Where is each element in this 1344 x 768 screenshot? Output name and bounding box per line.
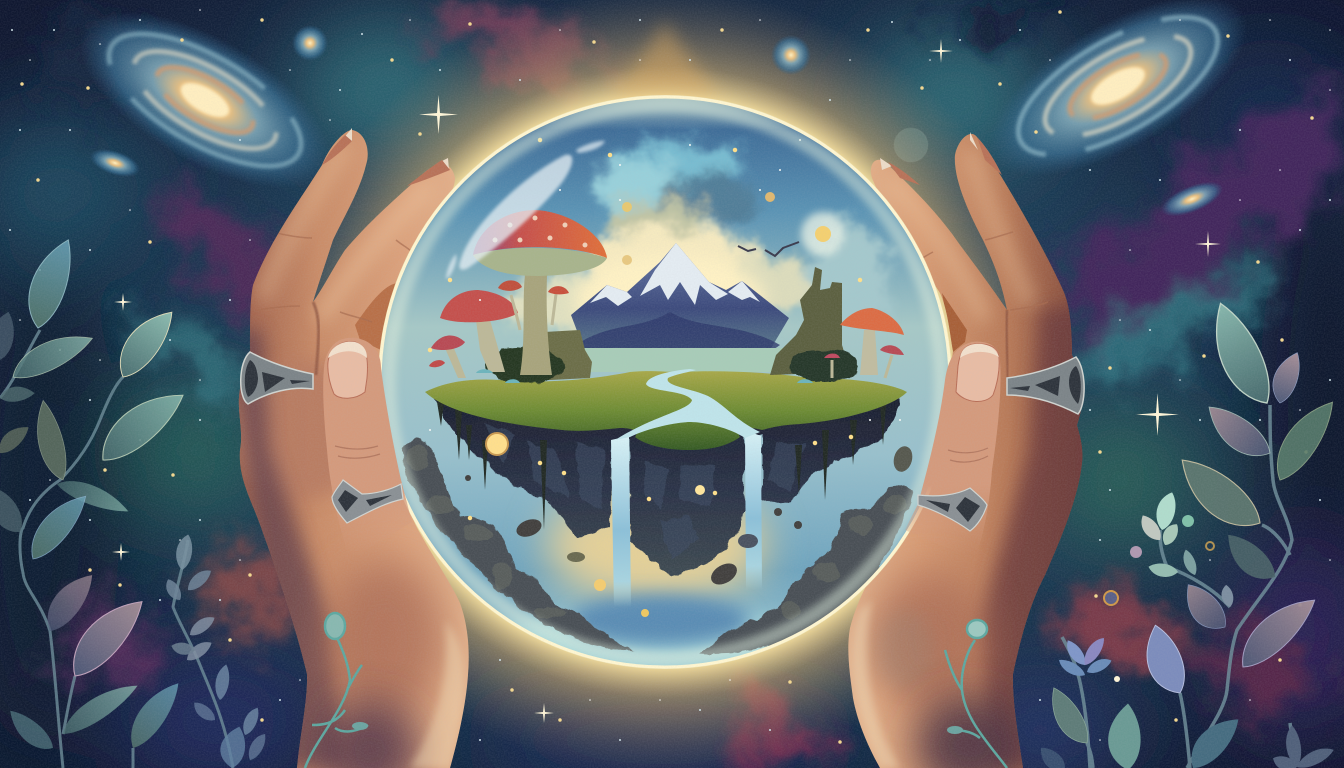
foliage: left clump xyxy=(485,347,565,383)
small mushrooms xyxy=(429,280,904,383)
sun and birds xyxy=(622,192,845,265)
left fingernail tips xyxy=(343,128,449,170)
glow: warm rays above orb xyxy=(610,20,720,95)
fireflies xyxy=(430,140,900,617)
ring: left index xyxy=(241,352,313,404)
hanging roots xyxy=(437,402,886,530)
river xyxy=(615,369,760,440)
mushroom: large xyxy=(473,210,607,375)
mushroom: right xyxy=(840,308,904,375)
plant: left foliage xyxy=(0,233,270,768)
clouds xyxy=(470,141,890,666)
right hand shading xyxy=(852,150,1100,768)
sprouts in front of wrists xyxy=(305,613,1007,768)
left thumb xyxy=(241,338,412,560)
island grass xyxy=(425,371,907,450)
galaxy: top left xyxy=(53,0,357,224)
orb sky xyxy=(380,95,950,675)
mushroom: medium left xyxy=(440,290,518,372)
floating boulders xyxy=(465,444,915,589)
ring: right thumb xyxy=(918,488,987,531)
right fingernail tips xyxy=(880,132,978,170)
ring: right index xyxy=(1007,357,1084,414)
orb rim glow xyxy=(378,95,952,669)
crystal orb xyxy=(378,95,952,675)
lower left rock arm xyxy=(403,438,635,652)
rock plates xyxy=(485,425,805,560)
orb rim xyxy=(380,97,950,667)
orb contents xyxy=(380,95,950,675)
left stems xyxy=(0,330,233,768)
small galaxies xyxy=(87,25,1227,223)
glass highlights xyxy=(446,141,605,279)
waterfalls xyxy=(611,430,762,607)
ring: left thumb xyxy=(332,480,403,523)
plant: right foliage xyxy=(1034,297,1342,768)
left thumb nail xyxy=(328,342,368,398)
ruins: right xyxy=(770,267,850,375)
sparkle stars xyxy=(112,39,1221,723)
galaxy: top right xyxy=(961,0,1275,212)
glow: halo around orb xyxy=(270,0,1060,768)
right hand xyxy=(845,120,1100,768)
right rock facets xyxy=(780,496,906,618)
left hand xyxy=(230,120,480,768)
lower right rock arm xyxy=(700,486,914,653)
distant plain xyxy=(584,348,782,372)
floating island underside xyxy=(434,398,900,575)
ruins: left xyxy=(522,330,592,380)
right thumb nail xyxy=(956,344,999,401)
left rock facets xyxy=(407,444,566,618)
right thumb xyxy=(905,342,1084,560)
mountains xyxy=(571,243,789,352)
foliage: right clump xyxy=(790,350,858,382)
left hand shading xyxy=(230,145,464,768)
inner rim shading xyxy=(389,106,941,658)
right stems xyxy=(1062,405,1297,768)
